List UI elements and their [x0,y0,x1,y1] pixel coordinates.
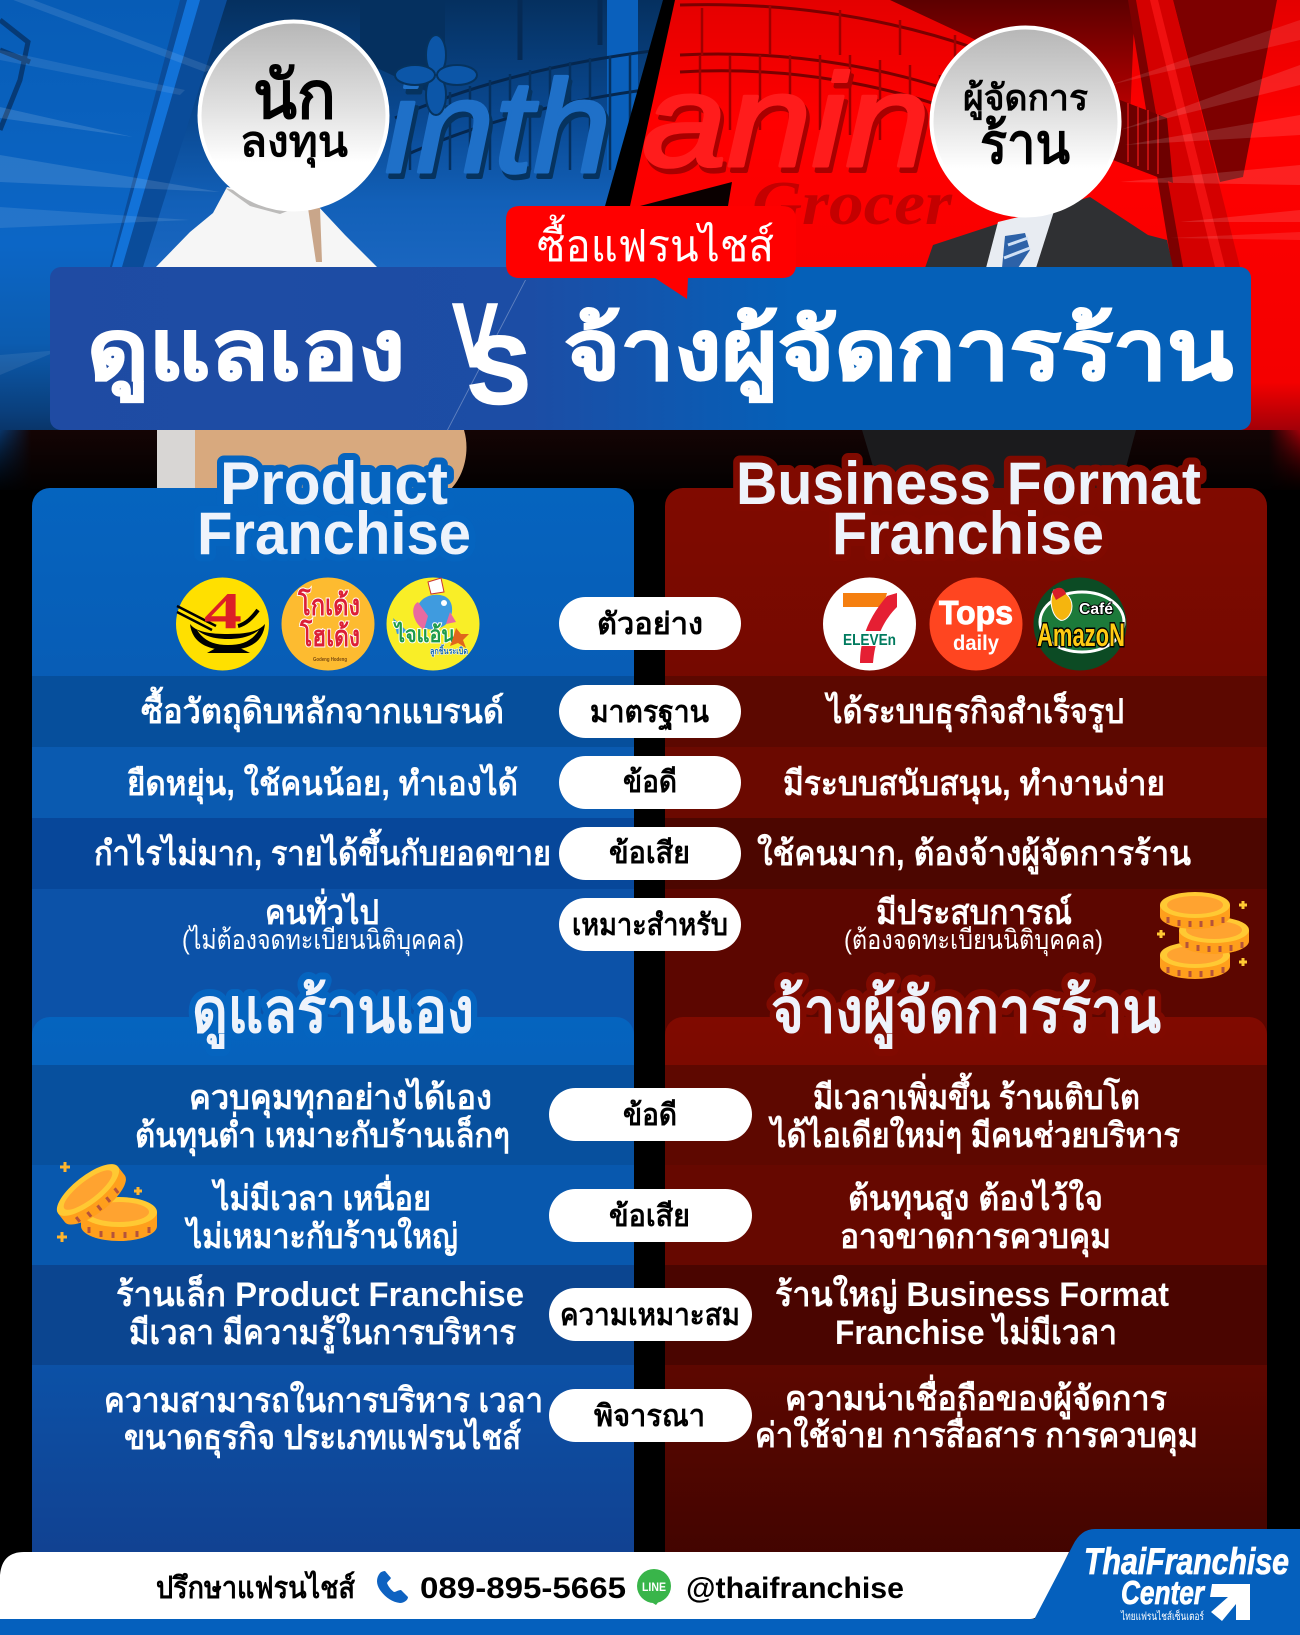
icon: line [637,1569,671,1605]
pill: suitability: ความเหมาะสม [560,1299,740,1332]
sign: blue lettering shadow: inth [388,58,614,205]
row text: self-run: ความสามารถในการบริหาร เวลา [104,1380,543,1420]
row text: self-run: ไม่เหมาะกับร้านใหญ่ [184,1216,458,1257]
sign: red lettering front: anin [642,47,930,194]
row text: product franchise: ซื้อวัตถุดิบหลักจากแบรนด์ [141,686,504,733]
icon: line: LINE [642,1580,666,1594]
icon: phone [377,1571,408,1603]
row text: self-run: ไม่มีเวลา เหนื่อย [211,1174,431,1218]
black wedge [640,182,732,206]
logo: thaifranchise center: Center [1121,1574,1206,1611]
row text: business format franchise: (ต้องจดทะเบียนนิติบุคคล) [844,925,1103,957]
footer consult label: ปรึกษาแฟรนไชส์ [156,1570,356,1605]
sign: red lettering back: anin [645,52,933,199]
person: investor shirt [155,187,466,490]
background: blue side [0,0,680,490]
panel: product franchise [32,488,634,1049]
icon: coins left [49,1156,157,1242]
pill: pros 2: ข้อดี [623,1099,677,1132]
logo: thaifranchise center [1026,1529,1300,1635]
footer line handle: @thaifranchise [686,1572,904,1605]
title bar [50,267,1251,430]
icon: coin stack [1157,892,1249,979]
row text: business format franchise: มีประสบการณ์ [876,893,1072,932]
row text: hired manager: มีเวลาเพิ่มขึ้น ร้านเติบโต [813,1072,1140,1117]
panel: self-run [32,1017,634,1587]
row text: hired manager [755,1072,1198,1457]
row text: product franchise: (ไม่ต้องจดทะเบียนนิติบุคคล) [182,925,464,957]
pill: cons 2 [549,1189,752,1242]
pill: cons: ข้อเสีย [609,837,690,870]
row text: product franchise [94,686,551,957]
logo: tops daily: daily [953,632,999,655]
callout: buy franchise [506,206,796,299]
label: ผู้จัดการ: ผู้จัดการ [963,77,1089,121]
row text: business format franchise: ได้ระบบธุรกิจสำเร็จรูป [824,690,1124,733]
diagonal divider [605,0,675,206]
panel: hired manager [665,1017,1267,1587]
logo: thaifranchise center: ไทยแฟรนไชส์เซ็นเตอร์ [1120,1609,1204,1623]
heading: business format franchise: Business Format [736,450,1201,517]
pill: suitable for: เหมาะสำหรับ [572,909,728,942]
row text: self-run: มีเวลา มีความรู้ในการบริหาร [129,1312,517,1354]
bottom fade behind panels [0,430,1300,490]
pill: considerations: พิจารณา [594,1400,705,1433]
heading: hired manager: จ้างผู้จัดการร้าน [771,977,1161,1049]
logo: giant fish [386,578,480,670]
title left: ดูแลเอง [87,303,405,403]
vs mark [452,285,530,424]
head circle: manager [932,28,1120,216]
pill: pros [559,756,741,809]
row text: product franchise: ยืดหยุ่น, ใช้คนน้อย, ทำเองได้ [127,763,518,805]
logo: giant fish: ลูกชิ้นระเบิด [430,644,468,657]
heading: self-run: ดูแลร้านเอง [192,977,474,1049]
logo: cafe amazon: AmazoN [1037,617,1125,653]
callout: buy franchise: ซื้อแฟรนไชส์ [537,214,774,271]
heading: business format franchise: Franchise [832,500,1104,567]
row text: product franchise: คนทั่วไป [265,888,379,932]
logo: 7-eleven [823,578,916,670]
sign: flower [395,35,477,115]
logo: godeng hodeng: Godeng Hodeng [313,657,347,663]
row text: business format franchise [757,690,1191,957]
logo: godeng hodeng: โฮเด้ง [299,618,360,653]
row text: self-run: ร้านเล็ก Product Franchise [116,1273,524,1314]
pill: considerations [549,1389,752,1442]
footer white bar [0,1552,1069,1619]
row text: hired manager: ต้นทุนสูง ต้องไว้ใจ [848,1178,1103,1220]
logo: godeng hodeng [282,578,374,670]
logo: cafe amazon: Café [1079,601,1113,618]
row text: hired manager: Franchise ไม่มีเวลา [835,1312,1117,1352]
head circle: investor [200,22,388,210]
pill: cons [559,827,741,880]
row text: self-run [104,1077,543,1459]
logo: noodle 4: 4 [204,583,242,640]
person: manager suit [862,197,1173,490]
row text: hired manager: ได้ไอเดียใหม่ๆ มีคนช่วยบริหาร [768,1115,1181,1155]
row text: business format franchise: ใช้คนมาก, ต้องจ้างผู้จัดการร้าน [757,833,1191,875]
vs mark: S [468,317,530,424]
row text: business format franchise: มีระบบสนับสนุน, ทำงานง่าย [783,765,1165,805]
heading: product franchise: Franchise [197,500,471,567]
head circle: investor: ลงทุน [240,118,348,168]
sign: grocer: Grocer [752,170,953,238]
pill: examples [559,597,741,650]
pill: pros: ข้อดี [623,766,677,799]
row text: hired manager: ความน่าเชื่อถือของผู้จัดการ [785,1374,1168,1420]
logo: tops daily: Tops [939,594,1013,631]
pill: suitability [549,1288,752,1341]
sign: blue lettering front: inth [385,53,611,200]
pill: standard: มาตรฐาน [590,696,709,732]
logo: godeng hodeng: โกเด้ง [297,587,360,622]
row text: self-run: ต้นทุนต่ำ เหมาะกับร้านเล็กๆ [135,1111,510,1157]
pill: cons 2: ข้อเสีย [609,1200,690,1233]
logo: cafe amazon [1034,578,1126,670]
pill: suitable for [559,898,741,951]
row text: product franchise: กำไรไม่มาก, รายได้ขึ้นกับยอดขาย [94,828,551,873]
row text: self-run: ควบคุมทุกอย่างได้เอง [189,1077,492,1119]
arrow [1210,1584,1250,1621]
row text: self-run: ขนาดธุรกิจ ประเภทแฟรนไชส์ [124,1417,521,1459]
background: red side [630,0,1300,486]
logo: noodle 4 [176,578,269,670]
logo: giant fish: ไจแอ้น [393,621,455,647]
footer band [0,1619,1300,1635]
heading: product franchise [197,450,471,567]
row text: hired manager: ค่าใช้จ่าย การสื่อสาร การควบคุม [755,1411,1198,1457]
pill: standard [559,685,741,738]
pill: examples: ตัวอย่าง [597,608,703,641]
row text: hired manager: อาจขาดการควบคุม [840,1218,1111,1258]
logo: tops daily [930,578,1022,670]
pill: pros 2 [549,1088,752,1141]
heading: business format franchise [736,450,1201,567]
heading: product franchise: Product [220,450,448,517]
logo: 7-eleven: ELEVEn [843,632,896,649]
title right: จ้างผู้จัดการร้าน [564,303,1233,403]
vs mark: V [452,285,498,387]
head circle: manager: ร้าน [980,112,1070,175]
footer phone number: 089-895-5665 [420,1572,626,1605]
label: นัก: นัก [253,58,336,132]
row text: hired manager: ร้านใหญ่ Business Format [775,1274,1169,1315]
panel: business format franchise [665,488,1267,1049]
